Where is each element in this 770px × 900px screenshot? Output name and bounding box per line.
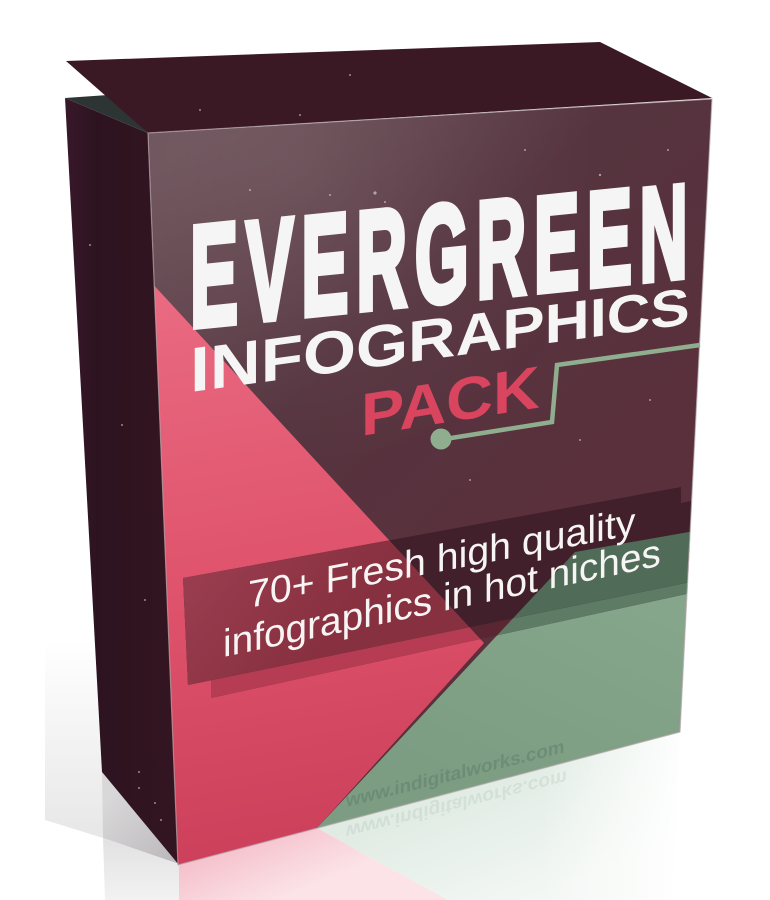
speckles bbox=[89, 74, 669, 821]
front panel edge lines bbox=[148, 99, 712, 865]
top flap bbox=[66, 42, 712, 133]
banner main layer bbox=[183, 487, 692, 685]
reflection: floor below side face bbox=[103, 838, 179, 900]
title: PACK: PACK bbox=[361, 354, 540, 449]
reflection: pink panel bbox=[179, 828, 448, 900]
title: INFOGRAPHICS: INFOGRAPHICS bbox=[190, 268, 690, 406]
banner text line 2: infographics in hot niches bbox=[223, 531, 661, 666]
banner text line 1: 70+ Fresh high quality bbox=[248, 500, 636, 617]
reflection: wall shadow beside side face bbox=[102, 772, 179, 864]
inner tab bbox=[65, 95, 148, 133]
banner shadow layer bbox=[211, 582, 688, 698]
reflection: green panel bbox=[317, 700, 700, 900]
reflection: haze left of the box bbox=[45, 640, 103, 838]
green panel bbox=[317, 582, 687, 828]
watermark: www.indigitalworks.com bbox=[345, 737, 565, 812]
pink triangle bbox=[140, 281, 484, 870]
left side face bbox=[65, 98, 179, 865]
reflection: mirrored watermark: www.indigitalworks.com bbox=[345, 766, 567, 842]
panel background bbox=[148, 99, 712, 865]
title: EVERGREEN: EVERGREEN bbox=[190, 147, 695, 359]
connector line with dot bbox=[430, 345, 700, 450]
front panel bbox=[140, 90, 720, 870]
highlight bbox=[180, 118, 438, 308]
